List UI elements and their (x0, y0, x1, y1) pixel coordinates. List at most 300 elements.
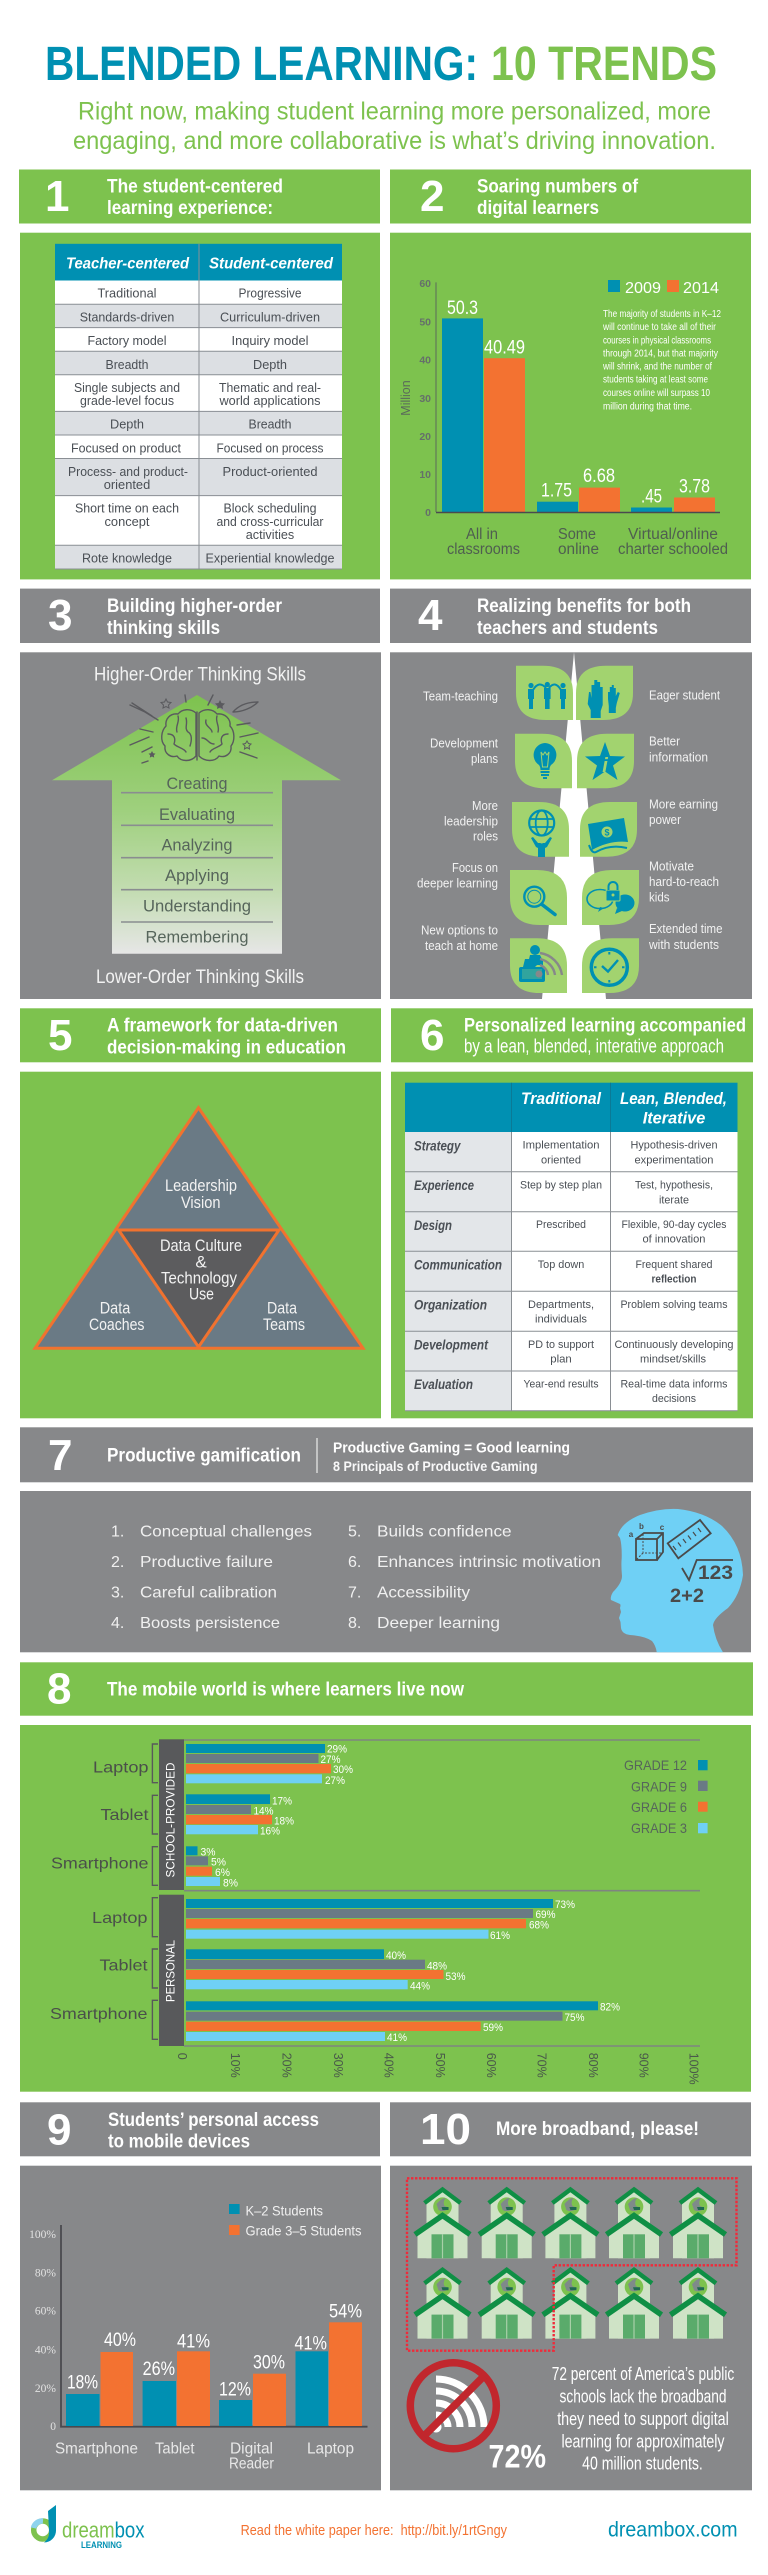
icon: information star: i (602, 755, 608, 777)
panel 7: productive gaming principles (20, 1491, 751, 1652)
bar values: 41% (294, 2334, 327, 2355)
x axis ticks: 60% (484, 2053, 498, 2078)
table body: Prescribed (536, 1219, 586, 1231)
table body: plan (550, 1353, 572, 1365)
table header: Lean, Blended, (620, 1089, 727, 1108)
bar values: .45 (641, 486, 662, 508)
y axis and ticks: 0 (425, 507, 431, 519)
section 4 header (390, 589, 751, 643)
icon: globe leader (529, 810, 554, 857)
section 9 header: Students’ personal access (108, 2110, 319, 2131)
right benefit labels: Better (649, 734, 681, 749)
icon: magnifier (524, 887, 555, 914)
legend (229, 2202, 362, 2238)
title: BLENDED LEARNING: (45, 38, 478, 91)
legend: GRADE 3 (631, 1820, 687, 1836)
section 8 header: 8 (47, 1664, 71, 1713)
table header: Traditional (521, 1089, 602, 1108)
section 6 header (391, 1008, 753, 1062)
footer logo: dreambox (62, 2517, 144, 2542)
right segment label (263, 1298, 305, 1334)
left benefit labels: Development (430, 735, 498, 750)
table header: Iterative (643, 1109, 705, 1128)
principles list column 1: 1. (111, 1524, 124, 1541)
x axis ticks: 100% (686, 2053, 700, 2085)
x axis ticks: 70% (534, 2053, 548, 2078)
section 3 header: thinking skills (107, 618, 220, 639)
footer logo (34, 2505, 144, 2550)
section 10 header (390, 2102, 751, 2156)
x axis ticks: 0 (175, 2053, 189, 2060)
school-provided bars: 14% (254, 1805, 274, 1817)
category labels (50, 1760, 149, 2023)
y axis ticks: 20% (35, 2383, 56, 2395)
table body: Design (414, 1218, 452, 1233)
x labels (55, 2440, 354, 2473)
personal bars: 59% (483, 2022, 503, 2034)
section 2 header: 2 (420, 172, 444, 221)
table body rows (55, 244, 342, 569)
legend: 2009 (625, 280, 661, 297)
legend (624, 1757, 708, 1836)
panel 4: benefits tree (390, 652, 752, 999)
personal bars: 44% (410, 1980, 430, 1992)
table body rows: Rote knowledge (82, 552, 172, 566)
panel 8: mobile device bar chart (20, 1725, 751, 2092)
table body rows: and cross-curricular (216, 515, 324, 529)
table body rows: Standards-driven (80, 310, 174, 324)
table body rows: Traditional (98, 287, 156, 301)
section 1 header: The student-centered (107, 176, 283, 198)
table body rows: Focused on process (216, 441, 324, 455)
x labels: Tablet (155, 2440, 195, 2457)
left benefit labels: Team-teaching (423, 689, 498, 704)
table body: Evaluation (414, 1377, 473, 1392)
table body rows: Focused on product (71, 441, 182, 455)
thinking levels: Understanding (143, 897, 251, 916)
section 4 header: 4 (418, 591, 443, 640)
left benefit labels: plans (471, 751, 498, 766)
section 5 header: 5 (48, 1011, 72, 1060)
bar values: 40% (104, 2330, 136, 2351)
table body: Experience (414, 1178, 474, 1193)
x labels: Digital (230, 2440, 273, 2457)
x labels: All in (466, 526, 498, 543)
bottom caption: Lower-Order Thinking Skills (96, 967, 304, 988)
icon: head with math: 123 (698, 1563, 733, 1584)
personal bars: 69% (536, 1909, 556, 1921)
bar values: 18% (67, 2373, 98, 2394)
table body: Frequent shared (636, 1259, 712, 1271)
pyramid (35, 1108, 363, 1348)
subtitle: Right now, making student learning more personalized, more (78, 97, 711, 125)
table body rows: Experiential knowledge (206, 552, 335, 566)
table body rows: Single subjects and (74, 381, 180, 395)
table body (405, 1132, 738, 1411)
bar values: 3.78 (679, 476, 710, 498)
x axis ticks: 50% (433, 2053, 447, 2078)
principles list column 1: 4. (111, 1615, 124, 1632)
table body rows: Progressive (238, 287, 302, 301)
chart note: students taking at least some (603, 375, 708, 386)
section 5 header: A framework for data-driven (107, 1015, 338, 1036)
icon: head with math: b (639, 1522, 644, 1531)
section 7 header: Productive gamification (107, 1446, 301, 1467)
panel 5: data framework triangle (20, 1072, 381, 1418)
principles list column 2: 8. (348, 1615, 361, 1632)
table body rows: Factory model (88, 334, 166, 348)
section 9 header: 9 (47, 2106, 71, 2155)
table body rows: Process- and product- (68, 465, 188, 479)
top segment label: Vision (181, 1193, 220, 1212)
legend (608, 280, 719, 297)
table body: Top down (538, 1259, 584, 1271)
top caption: Higher-Order Thinking Skills (94, 665, 306, 686)
principles list column 1: Conceptual challenges (140, 1524, 312, 1541)
bar values: 12% (219, 2379, 251, 2400)
table body rows: Short time on each (75, 501, 179, 515)
personal bars: 73% (555, 1899, 575, 1911)
table body rows: world applications (218, 394, 320, 408)
group label: personal: PERSONAL (166, 1939, 178, 2002)
school-provided bars: 8% (223, 1878, 238, 1890)
icon: team (528, 682, 566, 709)
principles list column 1: Careful calibration (140, 1585, 277, 1602)
icon: dreambox d mark (34, 2505, 56, 2542)
section 7 header: 7 (48, 1431, 72, 1480)
center segment label: Data Culture (160, 1236, 242, 1255)
white path (542, 652, 606, 999)
school-provided bars: 5% (211, 1856, 226, 1868)
bar values (447, 297, 710, 508)
category labels: Smartphone (50, 2006, 148, 2023)
y axis and ticks: Million (399, 380, 413, 416)
footer link text: Read the white paper here: http://bit.ly/1rtGngy (241, 2522, 507, 2539)
table body: iterate (659, 1194, 689, 1206)
section 7 header: 8 Principals of Productive Gaming (333, 1458, 538, 1474)
table body: Strategy (414, 1138, 462, 1153)
x axis ticks (175, 2053, 700, 2085)
principles list column 2 (348, 1524, 601, 1632)
principles list column 2: Enhances intrinsic motivation (377, 1554, 601, 1571)
personal bars: 68% (529, 1920, 549, 1932)
principles list column 1: Productive failure (140, 1554, 273, 1571)
left segment label: Coaches (89, 1315, 144, 1334)
section 5 header (20, 1008, 381, 1062)
table body: experimentation (634, 1154, 714, 1166)
table body rows: grade-level focus (80, 394, 174, 408)
personal bars: 75% (564, 2012, 585, 2024)
center segment label: Use (189, 1285, 214, 1304)
section 8 header (20, 1662, 753, 1716)
section 5 header: decision-making in education (107, 1037, 346, 1058)
section 9 header (20, 2102, 380, 2156)
school-provided bars: 30% (333, 1764, 353, 1776)
footer logo: LEARNING (81, 2540, 122, 2550)
principles list column 2: Accessibility (377, 1585, 470, 1602)
table body: Communication (414, 1258, 502, 1273)
school-provided bars: 18% (274, 1816, 294, 1828)
arrow (52, 695, 341, 954)
icon: lock and speech bubbles (587, 882, 634, 914)
thinking levels: Remembering (146, 927, 248, 946)
bar values (67, 2302, 362, 2400)
bar values: 54% (329, 2302, 362, 2323)
section 1 header: learning experience: (107, 198, 273, 219)
table body: of innovation (642, 1234, 706, 1246)
section 6 header: 6 (420, 1011, 444, 1060)
table header row: Teacher-centered (66, 256, 189, 273)
section 4 header: teachers and students (477, 618, 658, 639)
table body: Organization (414, 1298, 487, 1313)
x axis ticks: 80% (586, 2053, 600, 2078)
table body: mindset/skills (640, 1353, 707, 1365)
table body: Continuously developing (614, 1339, 734, 1351)
personal bars: 61% (490, 1930, 510, 1942)
legend: GRADE 12 (624, 1757, 687, 1773)
center segment label (160, 1236, 242, 1304)
principles list column 1 (111, 1524, 312, 1632)
x axis ticks: 20% (280, 2053, 294, 2078)
panel 1: student-centered table (20, 233, 380, 579)
table body: oriented (541, 1154, 581, 1166)
y axis ticks (29, 2229, 56, 2433)
chart note: The majority of students in K–12 (603, 309, 721, 320)
left benefit labels: leadership (444, 813, 498, 828)
personal bars: 53% (446, 1971, 466, 1983)
stat: 72 percent: 72% (488, 2438, 546, 2474)
section 10 header: More broadband, please! (496, 2119, 699, 2140)
table body rows: Breadth (106, 358, 149, 372)
center segment label: & (195, 1253, 207, 1272)
table body: individuals (535, 1313, 587, 1325)
right benefit labels: Motivate (649, 859, 694, 874)
thinking levels: Creating (166, 774, 228, 793)
category labels: Tablet (100, 1958, 148, 1975)
right benefit labels (648, 687, 722, 952)
category labels: Tablet (100, 1807, 149, 1824)
legend: GRADE 6 (631, 1799, 687, 1815)
right benefit labels: Eager student (649, 687, 720, 702)
school buildings (415, 2190, 726, 2339)
icon: light bulb (534, 743, 556, 778)
chart note (602, 309, 721, 412)
section 2 header: Soaring numbers of (477, 176, 639, 198)
principles list column 1: 2. (111, 1554, 124, 1571)
table body rows: Curriculum-driven (220, 310, 320, 324)
icon: learner at home with wifi (519, 945, 562, 982)
school-provided bars: 27% (320, 1754, 341, 1766)
legend: Grade 3–5 Students (246, 2222, 362, 2238)
icon: clock (591, 949, 627, 985)
x axis ticks: 40% (382, 2053, 396, 2078)
table body rows: Depth (110, 418, 144, 432)
chart note: through 2014, but that majority (603, 349, 718, 360)
right benefit labels: More earning (649, 797, 718, 812)
panel 6: lean blended table (391, 1072, 753, 1418)
left benefit labels: teach at home (425, 938, 498, 953)
axes (61, 2225, 368, 2427)
legend: GRADE 9 (631, 1778, 687, 1794)
principles list column 2: 5. (348, 1524, 361, 1541)
icon: head with math: c (660, 1523, 665, 1532)
y axis and ticks (399, 278, 436, 519)
center segment label: Technology (161, 1269, 237, 1288)
y axis and ticks: 40 (419, 354, 431, 366)
personal bars: 40% (386, 1950, 406, 1962)
panel 2: digital learners bar chart (390, 233, 751, 579)
right segment label: Data (267, 1298, 297, 1317)
top segment label (165, 1176, 237, 1212)
table body: Real-time data informs (620, 1378, 728, 1390)
personal bars: 41% (387, 2032, 407, 2044)
bar values: 1.75 (541, 480, 572, 502)
section 3 header: Building higher-order (107, 596, 283, 617)
chart note: courses online will surpass 10 (603, 388, 710, 399)
school-provided bars: 6% (215, 1867, 230, 1879)
icon: head with math: 2+2 (670, 1586, 704, 1607)
table body: Development (414, 1337, 488, 1352)
left benefit labels: Focus on (452, 860, 498, 875)
y axis ticks: 80% (35, 2267, 56, 2279)
left benefit labels: deeper learning (417, 876, 498, 891)
thinking levels (121, 774, 273, 946)
right benefit labels: Extended time (649, 921, 722, 936)
section 7 header: Productive Gaming = Good learning (333, 1440, 570, 1457)
x axis ticks: 30% (331, 2053, 345, 2078)
panel 3: thinking skills arrow (20, 652, 381, 999)
broadband text: they need to support digital (557, 2409, 729, 2429)
bar values: 50.3 (447, 297, 478, 319)
x labels: online (558, 541, 599, 558)
right benefit labels: information (649, 750, 708, 765)
y axis ticks: 100% (29, 2229, 56, 2241)
section 2 header (390, 170, 751, 224)
table body rows: concept (104, 515, 150, 529)
section 3 header (20, 589, 380, 643)
table body: Flexible, 90-day cycles (622, 1219, 727, 1231)
table body: Departments, (528, 1299, 594, 1311)
x axis ticks: 90% (636, 2053, 650, 2078)
leaves (510, 666, 639, 993)
school-provided bars: 29% (327, 1744, 347, 1756)
x labels (447, 526, 728, 558)
x labels: charter schooled (618, 541, 728, 558)
section 1 header: 1 (45, 172, 69, 221)
footer website: dreambox.com (608, 2518, 738, 2541)
y axis ticks: 0 (50, 2421, 56, 2433)
left benefit labels: More (472, 798, 498, 813)
x labels: Virtual/online (628, 526, 718, 543)
chart frame (152, 1740, 700, 2046)
table body rows: Thematic and real- (219, 381, 321, 395)
x labels: Smartphone (55, 2440, 138, 2457)
table body rows: oriented (104, 478, 150, 492)
school-provided bars: 17% (272, 1795, 292, 1807)
right benefit labels: kids (649, 890, 670, 905)
left segment label (89, 1298, 144, 1334)
principles list column 2: Builds confidence (377, 1524, 512, 1541)
icon: money (588, 818, 628, 852)
left segment label: Data (100, 1298, 131, 1317)
icon: raised hands (588, 680, 620, 718)
broadband text (552, 2364, 734, 2474)
icon: money: $ (604, 828, 610, 838)
title: 10 TRENDS (491, 38, 717, 91)
y axis ticks: 40% (35, 2344, 56, 2356)
x axis ticks: 10% (228, 2053, 242, 2078)
table body rows: Breadth (248, 418, 292, 432)
brain sparks (130, 695, 258, 763)
table header (405, 1083, 738, 1132)
x labels: classrooms (447, 541, 520, 558)
bar values: 6.68 (583, 465, 615, 487)
table body rows: Inquiry model (232, 334, 308, 348)
icon: brain (162, 710, 234, 760)
personal bars: 82% (600, 2002, 620, 2014)
school-provided bars (186, 1744, 353, 1890)
broadband text: learning for approximately (562, 2431, 724, 2451)
section 2 header: digital learners (477, 198, 599, 219)
table body: reflection (652, 1274, 697, 1286)
chart note: will continue to take all of their (602, 322, 717, 333)
bars (66, 2322, 362, 2426)
chart note: million during that time. (603, 402, 692, 412)
thinking levels: Evaluating (159, 805, 235, 824)
icon: information star (585, 742, 625, 780)
y axis and ticks: 50 (419, 316, 431, 328)
icon: head with math: a (629, 1530, 634, 1539)
legend: 2014 (683, 280, 719, 297)
section 3 header: 3 (48, 591, 72, 640)
table body rows: Block scheduling (224, 501, 317, 515)
bar values: 26% (143, 2359, 175, 2380)
subtitle (73, 97, 716, 155)
table header row (55, 244, 342, 280)
section 9 header: to mobile devices (108, 2132, 250, 2153)
table body rows: Product-oriented (222, 465, 318, 479)
top segment label: Leadership (165, 1176, 237, 1195)
red dotted outline of 72 percent (407, 2178, 736, 2351)
broadband text: 40 million students. (582, 2454, 703, 2474)
thinking levels: Analyzing (162, 835, 232, 854)
section 10 header: 10 (420, 2105, 471, 2154)
left benefit labels (417, 689, 498, 953)
group label: school-provided: SCHOOL-PROVIDED (166, 1762, 178, 1878)
personal bars (186, 1899, 620, 2044)
panel 9: personal device access chart (20, 2166, 381, 2490)
y axis ticks: 60% (35, 2306, 56, 2318)
table body: decisions (652, 1393, 696, 1405)
table header row: Student-centered (209, 256, 334, 273)
y axis and ticks: 60 (419, 278, 431, 290)
table body: Test, hypothesis, (635, 1180, 713, 1192)
right benefit labels: with students (648, 937, 719, 952)
category labels: Laptop (92, 1910, 148, 1927)
table body: Problem solving teams (620, 1299, 728, 1311)
school-provided bars: 27% (325, 1775, 345, 1787)
left benefit labels: roles (473, 829, 498, 844)
chart note: will shrink, and the number of (602, 362, 712, 373)
principles list column 2: 6. (348, 1554, 361, 1571)
x labels: Reader (229, 2456, 274, 2473)
bars (436, 318, 720, 512)
section 8 header: The mobile world is where learners live now (107, 1680, 464, 1701)
table body rows: Depth (253, 358, 287, 372)
icon: head with math (611, 1509, 743, 1652)
table body: Step by step plan (520, 1180, 602, 1192)
thinking levels: Applying (165, 866, 229, 885)
